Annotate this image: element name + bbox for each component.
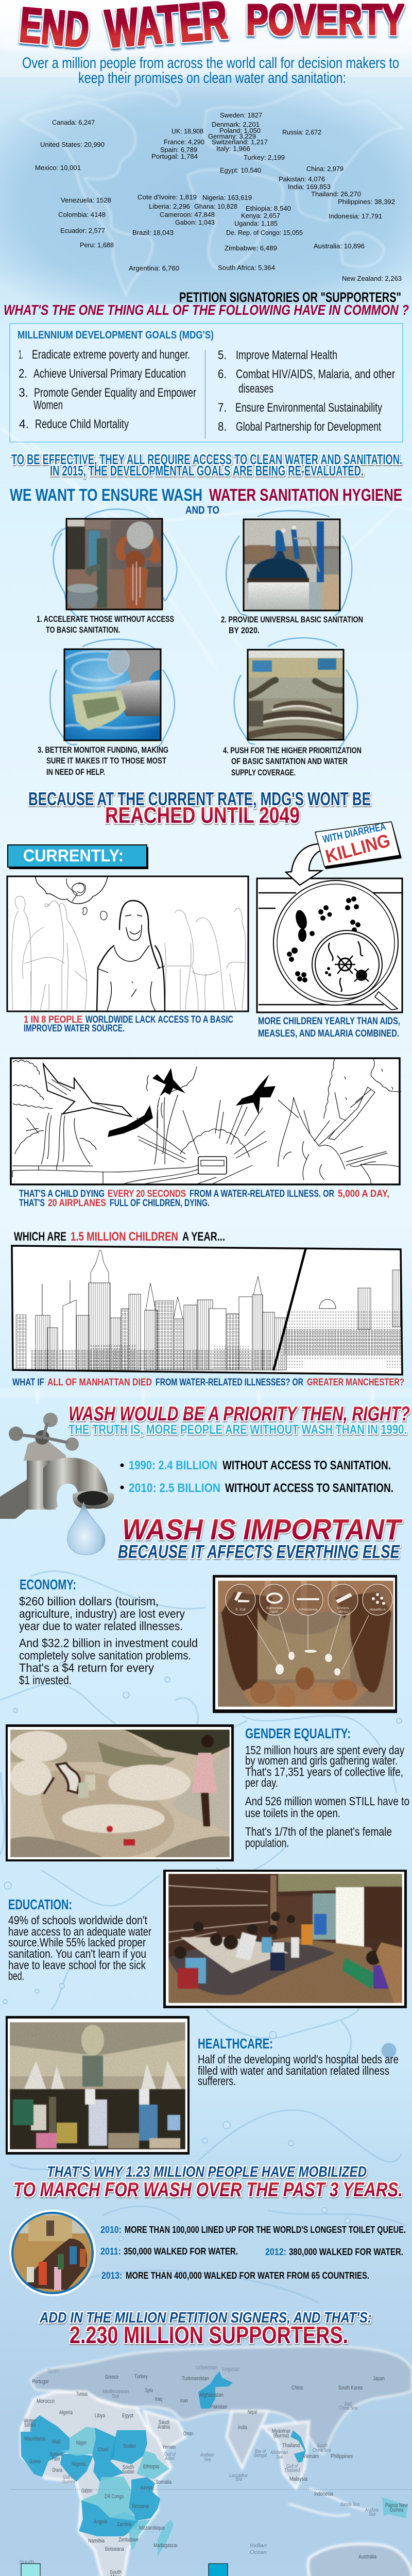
caption: Manhattan and Manchester: FROM WATER-RELATED ILLNESSES? OR <box>156 1377 303 1388</box>
goals heading: MILLENNIUM DEVELOPMENT GOALS (MDG'S) <box>18 329 214 341</box>
goals right column: diseases <box>238 382 273 396</box>
map: petition signatories by country: Nigeria: 163,619 <box>202 194 252 201</box>
map place labels: Somalia <box>156 2479 172 2485</box>
map: petition signatories by country: Mexico: 10,001 <box>35 164 81 172</box>
map place labels: Nigeria <box>72 2461 86 2467</box>
map: petition signatories by country: Brazil: 18,043 <box>132 229 174 236</box>
arrow: to petri dish <box>286 844 322 885</box>
timeline: marches by year: 2012: <box>265 2247 286 2257</box>
map place labels: Spain <box>47 2368 59 2374</box>
map place labels: Kenya <box>141 2485 153 2491</box>
map: petition signatories by country: Zimbabwe: 6,489 <box>225 244 277 252</box>
map place labels: Malaysia <box>289 2476 308 2482</box>
map: petition signatories by country: Portugal: 1,784 <box>151 152 198 160</box>
heading: 1.5 million children: 1.5 MILLION CHILDREN <box>71 1230 178 1244</box>
map place labels: Myanmar <box>272 2428 290 2434</box>
goals right column: 5. <box>218 348 227 362</box>
healthcare text <box>198 2053 399 2088</box>
education heading: EDUCATION: <box>8 1896 72 1912</box>
map place labels: DR Congo <box>105 2494 124 2500</box>
map: petition signatories by country: Russia: 2,672 <box>282 128 321 136</box>
goals right column: 7. <box>218 401 227 415</box>
photo: cupped hands with dirty water and pathogens <box>213 1575 397 1713</box>
goals left column: Achieve Universal Primary Education <box>33 367 186 381</box>
map: petition signatories by country: Uganda: 1,185 <box>234 219 278 227</box>
caption: child dying every 20 seconds <box>19 1189 389 1209</box>
title: END WATER POVERTY <box>18 0 404 59</box>
economy text: $1 invested. <box>19 1673 72 1687</box>
economy text: year due to water related illnesses. <box>19 1619 183 1633</box>
goals left column: 1. <box>19 348 23 362</box>
map place labels: Thailand <box>284 2468 300 2473</box>
map: petition signatories by country: New Zealand: 2,263 <box>342 275 402 282</box>
map place labels: Mali <box>52 2439 60 2445</box>
caption: child dying every 20 seconds: 5,000 A DAY, <box>338 1189 389 1199</box>
goals right column <box>218 348 395 434</box>
goals left column: 3. <box>19 386 28 400</box>
caption: Manhattan and Manchester <box>12 1377 404 1388</box>
caption: Manhattan and Manchester: ALL OF MANHATTAN DIED <box>47 1377 152 1388</box>
map place labels: Nepal <box>248 2409 257 2415</box>
map: petition signatories by country: Ethiopia: 8,540 <box>246 205 291 212</box>
photo: cupped hands with dirty water and pathogens: Salmonella <box>266 1606 283 1610</box>
map place labels: Saudi <box>159 2419 169 2426</box>
map place labels: Libya <box>95 2413 106 2419</box>
map: petition signatories by country: De. Rep. of Congo: 15,055 <box>226 229 303 236</box>
statement: access to clean water <box>11 451 402 479</box>
map place labels: Kyrgyzstan <box>222 2366 239 2372</box>
photo: crowded classroom <box>163 1870 407 2008</box>
map: petition signatories by country: South Africa: 5,364 <box>218 264 275 272</box>
photo: marchers in a circle frame <box>9 2210 96 2296</box>
map place labels: Arafura <box>365 2507 379 2513</box>
map place labels: Guinea <box>62 2479 75 2485</box>
map place labels: Aden <box>164 2456 175 2462</box>
statistics: sanitation access: 2010: 2.5 BILLION <box>129 1481 220 1495</box>
map: petition signatories by country: Argentina: 6,760 <box>129 264 179 272</box>
captions: goals 1 and 2: 1. ACCELERATE THOSE WITHOUT ACCESS <box>37 614 174 624</box>
heading: MDGs not reached until 2049 <box>28 788 371 828</box>
captions: goals 3 and 4: SUPPLY COVERAGE. <box>231 768 296 777</box>
map place labels: Afghanistan <box>199 2392 224 2398</box>
water splash background <box>0 1571 407 2303</box>
photo: United Nations assembly chamber <box>248 650 344 740</box>
map: petition signatories by country: China: 2,979 <box>306 165 344 173</box>
map: petition signatories by country: Germany: 3,229 <box>208 132 256 140</box>
captions: goals 1 and 2: TO BASIC SANITATION. <box>46 625 120 635</box>
map place labels: Chad <box>98 2447 108 2453</box>
map place labels: South Korea <box>338 2385 363 2391</box>
white airplane <box>43 1064 131 1116</box>
map place labels: Japan <box>373 2376 385 2382</box>
panel: crashing airplanes cartoon <box>11 1058 401 1184</box>
map place labels: East <box>345 2401 352 2407</box>
map place labels: Mozambique <box>139 2525 165 2531</box>
section: healthcare <box>198 2036 399 2088</box>
healthcare text: sufferers. <box>198 2074 236 2088</box>
photo: cupped hands with dirty water and pathogens: vibrios <box>338 1610 348 1614</box>
goals right column: 6. <box>218 367 227 381</box>
map: clean drinking water access <box>11 2346 412 2576</box>
black airplanes <box>108 1068 276 1137</box>
map place labels: Madagascar <box>153 2543 178 2549</box>
central girl figure <box>97 901 165 1011</box>
map place labels: Indian <box>250 2543 267 2549</box>
captions: goals 3 and 4: 3. BETTER MONITOR FUNDING, MAKING <box>38 745 168 755</box>
goals left column: 4. <box>19 417 29 431</box>
economy text: That's a $4 return for every <box>19 1661 154 1674</box>
caption: one in eight people: WORLDWIDE LACK ACCESS TO A BASIC <box>85 1014 233 1025</box>
captions: goals 3 and 4: OF BASIC SANITATION AND WATER <box>231 756 348 766</box>
caption: Manhattan and Manchester: WHAT IF <box>12 1377 44 1388</box>
map place labels: Guinea <box>390 2507 404 2513</box>
map place labels: Botswana <box>105 2546 125 2552</box>
map place labels: Australia <box>358 2554 377 2560</box>
economy heading: ECONOMY: <box>20 1577 76 1592</box>
legend: 50 to 75 percent <box>208 2564 401 2576</box>
map place labels: Tunisia <box>76 2391 88 2397</box>
photo: cupped hands with dirty water and pathogens: typhi <box>271 1610 278 1614</box>
goals left column: Women <box>33 398 63 412</box>
map: petition signatories by country: Ghana: 10,828 <box>194 202 237 210</box>
map place labels: Bay of <box>255 2449 266 2454</box>
map place labels: Iran <box>180 2398 188 2404</box>
economy text <box>19 1595 198 1687</box>
world map water splash <box>21 87 404 296</box>
map place labels: Niger <box>76 2440 87 2446</box>
map place labels: Yemen <box>162 2444 176 2450</box>
photo: cupped hands with dirty water and pathogens: Schistosoma <box>298 1608 318 1612</box>
section: economy <box>19 1577 198 1687</box>
map place labels: Sudan <box>122 2469 134 2475</box>
map place labels: South <box>123 2464 134 2470</box>
map: petition signatories by country: UK: 18,908 <box>171 127 203 135</box>
healthcare heading: HEALTHCARE: <box>198 2036 273 2052</box>
map place labels: Algeria <box>59 2410 73 2416</box>
education text: have access to an adequate water <box>8 1925 151 1938</box>
map: petition signatories by country: Denmark: 2,201 <box>212 121 260 128</box>
map place labels: Sea <box>276 2454 283 2460</box>
timeline: marches by year: 350,000 WALKED FOR WATER. <box>124 2246 238 2257</box>
map place labels: Laccadive <box>229 2473 248 2479</box>
map place labels: China Sea <box>313 2448 331 2453</box>
map place labels: Philippines <box>331 2453 353 2460</box>
goals left column: Reduce Child Mortality <box>35 417 129 431</box>
map place labels: Sahara <box>24 2422 36 2428</box>
photo: cupped hands with dirty water and pathogens: Cholera <box>337 1606 349 1610</box>
heading: 1.5 million children: WHICH ARE <box>14 1230 66 1244</box>
map place labels: Turkey <box>134 2374 148 2380</box>
map place labels: Gulf of <box>63 2475 75 2480</box>
heading: ensure WASH <box>10 485 402 504</box>
captions: goals 3 and 4: SURE IT MAKES IT TO THOSE MOST <box>46 756 166 766</box>
heading: WASH is important <box>118 1513 403 1562</box>
map place labels: Angola <box>94 2519 108 2525</box>
map: petition signatories by country: Peru: 1,688 <box>80 241 114 249</box>
map place labels: China <box>291 2385 303 2391</box>
photo: cupped hands with dirty water and pathogens: Hepatitis A <box>369 1608 386 1612</box>
map: petition signatories by country: Pakistan: 4,076 <box>279 175 325 183</box>
map place labels: South <box>19 2560 34 2565</box>
explosion rays <box>26 1100 387 1165</box>
label: and to: AND TO <box>185 504 219 516</box>
goals left column: 2. <box>19 367 27 381</box>
map place labels: Gulf of <box>164 2452 176 2458</box>
map place labels: South <box>317 2443 328 2449</box>
map place labels: South <box>110 2569 122 2575</box>
caption: child dying every 20 seconds: 20 AIRPLANES <box>48 1198 106 1209</box>
panel: one in eight people cartoon <box>7 876 248 1011</box>
caption: one in eight people: 1 IN 8 PEOPLE <box>24 1014 82 1025</box>
goals left column: Promote Gender Equality and Empower <box>34 386 196 400</box>
heading: add in petition signers <box>39 2310 372 2348</box>
falling plane <box>329 1087 375 1140</box>
panel: millennium development goals <box>10 324 403 442</box>
map place labels: Arabia <box>158 2424 170 2430</box>
land masses <box>21 2346 412 2576</box>
map: petition signatories by country: Sweden: 1827 <box>220 111 262 119</box>
captions: goals 3 and 4: IN NEED OF HELP. <box>46 767 105 777</box>
map: petition signatories by country: Egypt: 10,540 <box>220 166 261 174</box>
heading: 1.5 million children <box>14 1230 225 1244</box>
map: petition signatories by country <box>35 111 402 282</box>
map place labels: Gulf of <box>286 2464 298 2469</box>
map: petition signatories by country: Ecuador: 2,577 <box>60 227 105 234</box>
gender text: per day. <box>245 1776 278 1789</box>
education text: 49% of schools worldwide don't <box>8 1913 148 1927</box>
economy text: completely solve sanitation problems. <box>19 1649 191 1662</box>
map place labels: Oman <box>183 2431 193 2437</box>
caption: child dying every 20 seconds: THAT'S <box>19 1198 45 1209</box>
map place labels: Gabon <box>81 2488 92 2494</box>
map place labels: Namibia <box>88 2538 105 2544</box>
photo: water treatment plant <box>244 519 340 611</box>
economy text: $260 billion dollars (tourism, <box>19 1595 159 1608</box>
map place labels: India <box>238 2425 248 2431</box>
callout: killing with diarrhea: KILLING <box>323 829 392 867</box>
map: petition signatories by country: Cameroon: 47,848 <box>160 211 215 218</box>
map place labels: Iraq <box>155 2396 162 2402</box>
pathogen labels <box>226 1584 392 1615</box>
map place labels: Sea <box>204 2457 211 2463</box>
education text: have to leave school for the sick <box>8 1958 146 1972</box>
gender heading: GENDER EQUALITY: <box>245 1725 351 1741</box>
banner: currently: CURRENTLY: <box>23 846 124 865</box>
photo: crowded hospital ward <box>6 2016 190 2155</box>
map: petition signatories by country: Switzerland: 1,217 <box>212 138 268 146</box>
map place labels: Thailand <box>282 2443 300 2449</box>
equator line <box>11 2489 412 2490</box>
goals right column: Improve Maternal Health <box>236 348 337 362</box>
economy text: And $32.2 billion in investment could <box>19 1636 198 1650</box>
map place labels: Andaman <box>270 2450 288 2455</box>
gender text <box>245 1743 409 1850</box>
education text: sanitation. You can't learn if you <box>8 1947 146 1960</box>
background crowd outlines <box>12 896 246 1011</box>
timeline: marches by year: MORE THAN 400,000 WALKED FOR WATER FROM 65 COUNTRIES. <box>126 2270 369 2281</box>
gender text: use toilets in the open. <box>245 1806 340 1820</box>
map place labels: China Sea <box>339 2405 357 2411</box>
map: petition signatories by country: Thailand: 26,270 <box>311 190 361 198</box>
banner: currently <box>8 845 148 869</box>
smoke columns <box>13 1059 401 1170</box>
icon: dripping faucet <box>0 1413 114 1555</box>
map place labels: Vietnam <box>303 2453 319 2460</box>
map place labels: Sea <box>112 2394 119 2399</box>
statistics: sanitation access <box>121 1459 393 1495</box>
map place labels: Guinea <box>29 2459 41 2465</box>
map place labels: Burkina <box>50 2451 63 2458</box>
countries: 50 to 75 percent clean water <box>21 2371 306 2536</box>
captions: goals 1 and 2 <box>37 614 363 635</box>
map place labels: Zimbabwe <box>118 2537 139 2543</box>
caption: more children yearly <box>258 1016 400 1039</box>
map place labels: Ocean <box>250 2550 267 2555</box>
panel: diarrhea microbes cartoon <box>257 878 402 1012</box>
caption: child dying every 20 seconds: FULL OF CHILDREN, DYING. <box>110 1198 210 1209</box>
section: gender equality <box>245 1725 409 1850</box>
caption: one in eight people: IMPROVED WATER SOURCE. <box>24 1023 125 1034</box>
heading: add in petition signers: 2.230 MILLION SUPPORTERS. <box>70 2321 348 2348</box>
map: petition signatories by country: Canada: 6,247 <box>52 118 95 126</box>
map: petition signatories by country: Venezuela: 1528 <box>61 196 111 204</box>
map place labels: Greece <box>105 2374 118 2380</box>
map: petition signatories by country: Philippines: 38,392 <box>338 198 395 206</box>
map: petition signatories by country: Italy: 1,966 <box>216 145 250 152</box>
caption: child dying every 20 seconds: EVERY 20 SECONDS <box>108 1189 186 1199</box>
map place labels: Portugal <box>32 2379 48 2385</box>
heading: WASH would be a priority <box>68 1403 410 1437</box>
map place labels: (Burma) <box>273 2433 289 2439</box>
countries: under 50 percent clean water <box>60 2427 407 2556</box>
caption: child dying every 20 seconds: THAT'S A CHILD DYING <box>19 1189 105 1199</box>
map: petition signatories by country: India: 169,853 <box>288 183 331 191</box>
thought bubble with toilet <box>36 877 108 920</box>
legend: under 50 percent <box>21 2564 195 2576</box>
timeline: marches by year <box>100 2225 406 2281</box>
map place labels: Morocco <box>37 2398 55 2404</box>
map place labels: Bengal <box>254 2453 267 2459</box>
map place labels: Tanzania <box>131 2503 149 2510</box>
map place labels: Uzbekistan <box>196 2365 217 2371</box>
map: petition signatories by country: Turkey: 2,199 <box>244 154 285 161</box>
map: petition signatories by country: Cote d'Ivoire: 1,819 <box>138 193 197 201</box>
map place labels: Sea <box>369 2512 375 2517</box>
map: petition signatories by country: Australia: 10,896 <box>314 242 365 250</box>
water splash frames around photos <box>50 509 357 747</box>
map place labels: Turkmenistan <box>182 2376 209 2382</box>
map place labels: Pakistan <box>210 2404 227 2410</box>
map place labels: Mediterranean <box>102 2389 129 2395</box>
map place labels: Zambia <box>117 2521 132 2528</box>
timeline: marches by year: 2010: <box>100 2225 122 2235</box>
photo: boy washing at water pump <box>66 519 162 611</box>
map place labels: Sea <box>235 2477 242 2482</box>
pale water streaks <box>0 1388 412 1404</box>
callout: killing with diarrhea: WITH DIARRHEA <box>321 821 387 845</box>
map: petition signatories by country: Spain: 6,789 <box>160 146 197 154</box>
gender text: population. <box>245 1836 289 1850</box>
heading: MDGs not reached until 2049: REACHED UNTIL 2049 <box>105 803 300 828</box>
economy text: agriculture, industry) are lost every <box>19 1607 185 1620</box>
photo: children collecting water among rubbish <box>6 1724 234 1861</box>
germ colonies <box>287 896 360 982</box>
map: petition signatories by country: Kenya: 2,657 <box>241 212 280 219</box>
heading: march for WASH <box>13 2164 403 2201</box>
map place labels: Indonesia <box>314 2491 334 2497</box>
map: petition signatories by country: Gabon: 1,043 <box>175 218 215 226</box>
water drop <box>67 1502 105 1555</box>
map place labels: Sudan <box>123 2443 136 2449</box>
map place labels <box>19 2365 408 2576</box>
map place labels: Egypt <box>122 2413 133 2419</box>
timeline: marches by year: 2011: <box>100 2246 121 2257</box>
background ripple lines <box>0 428 412 670</box>
map place labels: Ghana <box>52 2467 63 2473</box>
education text: source.While 55% lacked proper <box>8 1936 146 1949</box>
statistics: sanitation access: 1990: 2.4 BILLION <box>129 1459 217 1472</box>
map place labels: Mauritania <box>24 2436 46 2442</box>
photo: cupped hands with dirty water and pathogens: E. Coli <box>235 1608 246 1612</box>
map: petition signatories by country: Colombia: 4148 <box>58 211 106 218</box>
captions: goals 1 and 2: BY 2020. <box>229 625 260 635</box>
goals left column <box>19 348 196 431</box>
captions: goals 3 and 4: 4. PUSH FOR THE HIGHER PRIORITIZATION <box>223 745 362 755</box>
Manchester skyline <box>278 1270 401 1370</box>
education text: bed. <box>8 1969 24 1982</box>
map place labels: Ethiopia <box>143 2464 160 2470</box>
map: petition signatories by country: United States: 20,990 <box>40 141 105 148</box>
goals right column: 8. <box>218 420 227 434</box>
map place labels: Banda Sea <box>340 2502 359 2507</box>
map: petition signatories by country: Poland: 1,050 <box>219 127 261 134</box>
map place labels: Western <box>24 2418 36 2424</box>
map place labels: Arabian <box>200 2452 214 2458</box>
captions: goals 3 and 4 <box>38 745 362 777</box>
Manhattan skyline <box>16 1250 286 1370</box>
captions: goals 1 and 2: 2. PROVIDE UNIVERSAL BASIC SANITATION <box>221 615 363 624</box>
heading: ensure WASH: WE WANT TO ENSURE WASH <box>10 485 202 504</box>
panel: Manhattan and Manchester skylines <box>12 1246 402 1375</box>
road and bus <box>12 1154 400 1184</box>
education text <box>8 1913 151 1982</box>
caption: child dying every 20 seconds: FROM A WATER-RELATED ILLNESS. OR <box>190 1189 334 1199</box>
map: petition signatories by country: Indonesia: 17,791 <box>329 212 382 220</box>
map place labels: Faso <box>52 2456 60 2462</box>
map: petition signatories by country: France: 4,290 <box>164 138 204 146</box>
map place labels: Syria <box>145 2387 153 2394</box>
magnifying glass <box>312 930 398 1010</box>
heading: 1.5 million children: A YEAR... <box>182 1230 225 1244</box>
goals left column: Eradicate extreme poverty and hunger. <box>32 348 190 362</box>
intro subheading <box>22 55 399 87</box>
petri dish <box>273 880 398 1005</box>
caption: one in eight people <box>24 1014 233 1034</box>
photo: money from a water pipe <box>57 648 161 740</box>
map: petition signatories by country: Liberia: 2,296 <box>149 202 190 210</box>
section: education <box>8 1896 151 1982</box>
timeline: marches by year: 2013: <box>101 2270 122 2281</box>
